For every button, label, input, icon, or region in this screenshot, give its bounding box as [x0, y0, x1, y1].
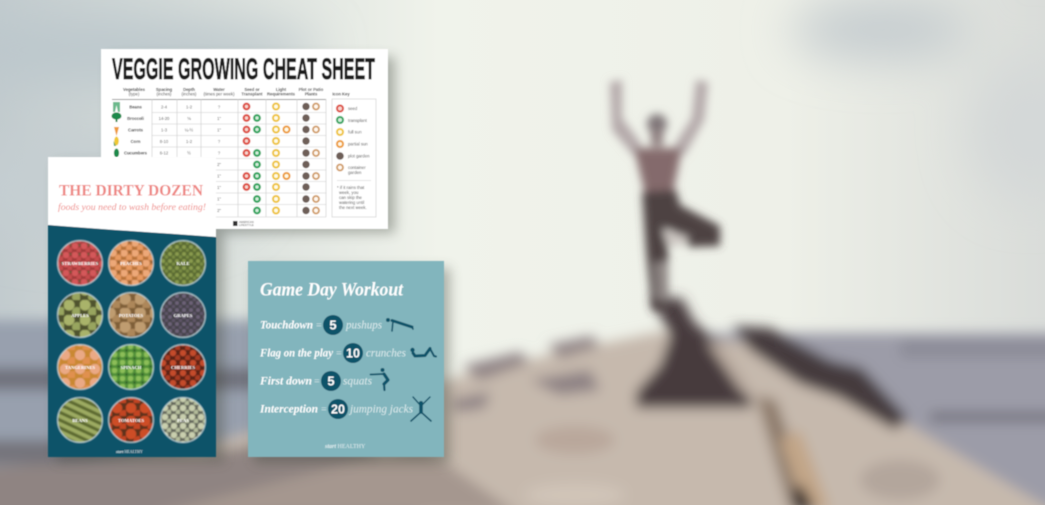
heading: workout title: Game Day Workout — [260, 280, 404, 300]
icon key legend: plot garden — [348, 154, 370, 158]
workout row: first down: First down — [259, 376, 312, 388]
icon key legend: can skip the — [339, 195, 363, 200]
produce: beans: BEANS — [72, 418, 88, 423]
table column headers: Seed or — [244, 87, 260, 92]
workout row: touchdown — [260, 315, 413, 335]
table row labels and values: 14-20 — [159, 116, 170, 121]
workout row: flag on the play: Flag on the play — [259, 348, 334, 360]
panel: Veggie Growing Cheat Sheet — [101, 49, 388, 229]
icon: squats — [370, 368, 388, 390]
icon: crunches — [410, 348, 436, 356]
table column headers: Requirements — [267, 92, 296, 96]
seed / transplant icons — [244, 104, 260, 213]
icon key legend: transplant — [348, 118, 368, 123]
produce: tomatoes — [108, 398, 154, 442]
table row labels and values: ⅛ — [187, 116, 191, 121]
workout row: flag on the play: = — [336, 348, 342, 360]
table column headers: Light — [276, 87, 287, 92]
produce: tomatoes: TOMATOES — [118, 418, 144, 423]
icon key legend — [336, 106, 370, 210]
workout row: interception — [259, 397, 431, 421]
card shadows — [56, 57, 450, 463]
produce: kale: KALE — [176, 261, 190, 266]
produce: peaches — [108, 240, 154, 286]
table row labels and values: Cucumbers — [124, 150, 148, 156]
produce circles grid — [58, 240, 206, 442]
light requirement icons — [273, 104, 290, 214]
workout footer logo: start HEALTHY — [324, 444, 366, 450]
table row labels and values — [124, 104, 221, 213]
table row labels and values: 1" — [217, 196, 221, 202]
heading: cheat sheet title: VEGGIE GROWING CHEAT SHEET — [112, 53, 375, 86]
produce: potatoes — [108, 292, 154, 338]
table row labels and values: 1" — [217, 128, 221, 132]
subheading: foods you need to wash before eating! — [58, 202, 206, 213]
table column headers: (inches) — [157, 92, 172, 96]
produce: cherries: CHERRIES — [171, 365, 195, 370]
table row labels and values: ½ — [187, 150, 191, 156]
table column headers: Icon Key — [332, 92, 350, 96]
workout row: flag on the play: 10 — [346, 346, 360, 360]
table column headers: Vegetables — [123, 87, 146, 92]
table row labels and values: ¼-½ — [185, 128, 194, 132]
produce: grapes — [160, 292, 206, 338]
table row labels and values: 2" — [217, 162, 221, 167]
table row labels and values: 1-2 — [186, 104, 193, 110]
cheat sheet footer logo: LIFESTYLE — [239, 223, 254, 227]
produce: strawberries: STRAWBERRIES — [62, 261, 99, 266]
table row labels and values: 1" — [217, 185, 221, 190]
plot / patio icons — [302, 103, 319, 214]
produce: peas — [160, 398, 206, 442]
table row labels and values: Corn — [131, 139, 141, 144]
cheat sheet footer logo — [233, 220, 254, 227]
produce: apples — [58, 292, 102, 338]
veggie icons — [112, 102, 122, 158]
cheat sheet footer logo: AMERICAN — [239, 220, 254, 224]
table column headers: Spacing — [156, 87, 173, 92]
icon key legend: the next week. — [339, 205, 367, 210]
workout row: touchdown: pushups — [345, 320, 382, 332]
workout row: interception: = — [321, 404, 327, 416]
produce: tangerines — [58, 344, 102, 390]
workout row: first down — [259, 368, 388, 391]
table column headers: Plot or Patio — [299, 87, 324, 92]
table row labels and values: 1" — [217, 116, 221, 121]
produce: kale — [160, 240, 206, 286]
workout row: first down: 5 — [327, 374, 335, 388]
table row labels and values: 1-3 — [161, 128, 168, 132]
table column headers: Plants — [305, 92, 318, 96]
icon key legend: seed — [348, 106, 358, 111]
workout row: touchdown: = — [316, 320, 322, 332]
table column headers: (type) — [129, 92, 140, 96]
produce: potatoes: POTATOES — [119, 313, 144, 318]
icon key legend: partial sun — [348, 142, 368, 146]
table column headers: Depth — [183, 87, 195, 92]
workout row: flag on the play — [259, 343, 436, 363]
produce: tangerines: TANGERINES — [65, 365, 95, 370]
icon: jumping jacks — [411, 397, 431, 421]
produce: peaches: PEACHES — [120, 261, 142, 266]
produce: cherries — [160, 344, 206, 390]
table row labels and values: 6-12 — [160, 150, 169, 156]
produce: strawberries — [58, 240, 102, 286]
produce: spinach — [108, 344, 154, 390]
workout row: interception: Interception — [259, 404, 318, 416]
produce: spinach: SPINACH — [121, 365, 142, 370]
table grid — [112, 99, 376, 217]
table row labels and values: Beans — [129, 104, 142, 110]
dirty dozen footer logo: start HEALTHY — [115, 449, 143, 454]
table row labels and values: 2" — [217, 208, 221, 213]
workout row: interception: jumping jacks — [348, 404, 414, 416]
produce: grapes: GRAPES — [174, 313, 193, 318]
icon key legend: * if it rains that — [337, 185, 365, 190]
workout row: touchdown: Touchdown — [260, 320, 313, 332]
table row labels and values: Carrots — [128, 128, 144, 132]
produce: peas: PEAS — [177, 418, 189, 423]
workout row: interception: 20 — [331, 402, 345, 416]
icon key legend: watering until — [339, 200, 364, 205]
panel: The Dirty Dozen — [48, 157, 216, 457]
table row labels and values: ? — [218, 104, 221, 110]
table row labels and values: Broccoli — [127, 116, 144, 121]
produce: apples: APPLES — [71, 313, 89, 318]
table column headers: (times per week) — [204, 92, 235, 96]
table row labels and values: 8-10 — [160, 139, 169, 144]
table column headers: (inches) — [182, 92, 197, 96]
table column headers — [123, 87, 350, 96]
table row labels and values: ? — [218, 150, 221, 156]
table column headers: Water — [213, 87, 225, 92]
panel: Game Day Workout — [248, 261, 444, 457]
workout row: touchdown: 5 — [329, 318, 337, 332]
icon: pushups — [386, 318, 413, 331]
table row labels and values: 1" — [217, 174, 221, 178]
icon key legend: full sun — [348, 130, 362, 134]
icon key legend: garden — [348, 170, 362, 175]
table column headers: Transplant — [241, 92, 263, 96]
table row labels and values: ? — [218, 139, 221, 144]
icon key legend: week, you — [339, 190, 359, 195]
heading: dirty dozen title: THE DIRTY DOZEN — [59, 182, 203, 200]
workout row: flag on the play: crunches — [366, 348, 407, 360]
icon key legend: container — [348, 165, 366, 170]
workout row: first down: squats — [343, 376, 373, 388]
table row labels and values: 2-4 — [161, 104, 168, 110]
workout row: first down: = — [314, 376, 320, 388]
produce: beans — [58, 398, 102, 442]
table row labels and values: 1-2 — [186, 139, 193, 144]
